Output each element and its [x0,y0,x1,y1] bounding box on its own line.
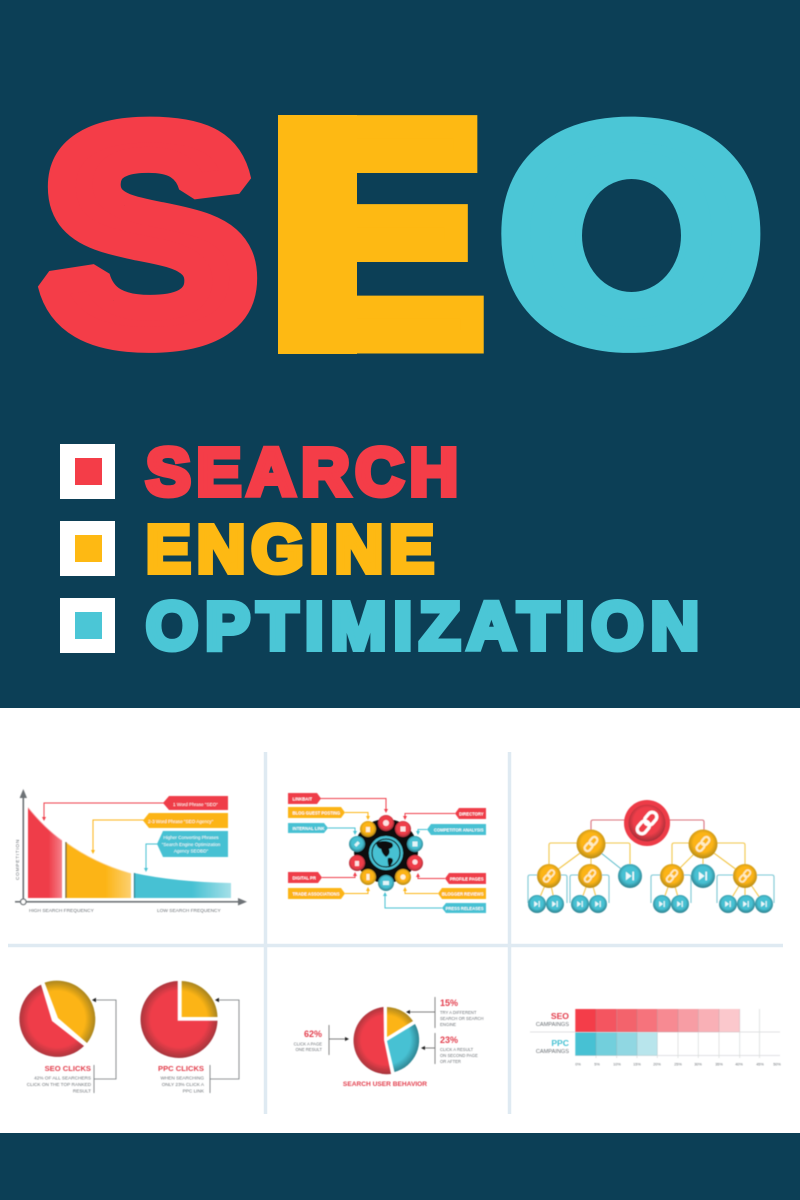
panel: link tree diagram [528,800,774,913]
grid [530,1009,780,1058]
description: PPC LINK [183,1088,205,1094]
stat: 62%: ONE RESULT [296,1047,322,1052]
label: competitor analysis: COMPETITOR ANALYSIS [434,828,484,832]
label: digital pr: DIGITAL PR [292,876,316,880]
bullet: red square [60,444,115,499]
stat: 23%: OR AFTER [440,1059,461,1064]
axis labels [575,1062,781,1066]
label: directory [403,808,486,820]
label: profile pages [416,873,486,884]
globe [369,836,403,870]
stat: 15%: TRY A DIFFERENT [440,1010,477,1015]
callout: higher converting phrases: "Search Engine Optimization [162,842,221,847]
axes [15,789,247,906]
pointer [92,998,116,1093]
label: trade associations: TRADE ASSOCIATIONS [292,892,340,896]
description: CLICK ON THE TOP RANKED [27,1082,92,1087]
stat: 62% [294,1025,349,1055]
label: linkbait [288,793,388,813]
callout: 2-3 word phrase: 2-3 Word Phrase "SEO Agency" [148,819,214,824]
description: 42% OF ALL SEARCHERS [34,1076,91,1080]
axis labels: 15% [633,1062,641,1066]
stat: 23% [421,1033,478,1064]
node ring [349,815,423,891]
pie [354,1007,419,1074]
SEO label: SEO [551,1011,569,1021]
bullet: yellow square [60,521,115,576]
label: blog guest posting [288,807,370,820]
panel: campaigns bar chart [530,1009,781,1066]
label: linkbait: LINKBAIT [292,796,312,802]
axis labels: 30% [694,1062,702,1066]
title: SEO [42,59,760,408]
teal curve area [134,873,231,898]
callout: 1 word phrase: 1 Word Phrase "SEO" [173,802,218,807]
title: SEO: E [272,59,484,408]
axis label: competition: COMPETITION [15,839,21,880]
label: blogger reviews: BLOGGER REVIEWS [442,892,484,896]
title: SEO: O [502,68,760,400]
callout: higher converting phrases: Agency SEOBD" [174,848,209,854]
axis labels: 50% [773,1062,781,1066]
description [160,1076,205,1094]
bullet: teal square [60,598,115,653]
description [27,1076,92,1094]
description: ONLY 23% CLICK A [162,1082,205,1087]
panel: PPC clicks pie [141,981,239,1094]
callout: higher converting phrases: Higher Converting Phrases [163,835,219,840]
PPC bar [575,1032,657,1056]
stat: 23%: 23% [440,1035,458,1045]
acronym list [60,435,699,664]
axis labels: 25% [674,1062,682,1066]
red curve area [28,807,62,898]
label: trade associations [288,887,370,899]
PPC label: PPC [551,1038,569,1048]
word: ENGINE: ENGINE [146,512,434,587]
stat: 15%: ENGINE [440,1022,456,1027]
word: SEARCH: SEARCH [146,435,458,510]
word: OPTIMIZATION: OPTIMIZATION [146,589,699,664]
panel: competition curve chart [15,789,247,914]
label: blogger reviews [403,887,486,899]
panel: search user behavior pie [294,997,484,1088]
callout: higher converting phrases [144,831,228,872]
label: press releases: PRESS RELEASES [446,906,484,911]
SEO label [536,1011,569,1028]
teal nodes [528,864,773,913]
heading: PPC CLICKS [158,1064,204,1073]
label: press releases [383,892,486,913]
callout: 1 word phrase [42,796,228,821]
axis labels: 0% [575,1062,581,1066]
SEO label: CAMPAINGS [536,1022,569,1028]
stat: 15%: 15% [440,998,458,1008]
PPC label: CAMPAINGS [536,1049,569,1055]
stat: 15% [406,997,484,1028]
SEO bar [575,1009,740,1032]
label: digital pr [288,872,357,883]
description: WHEN SEARCHING [160,1076,204,1080]
bottom navy band [0,1133,800,1200]
panel: link building wheel [288,793,486,913]
title: SEO: S [42,69,256,401]
axis labels: 35% [715,1062,723,1066]
axis labels: 10% [613,1062,621,1066]
yellow nodes [537,830,757,888]
heading: SEO CLICKS [45,1064,91,1073]
connector lines [528,820,774,904]
axis label: low search frequency: LOW SEARCH FREQUENCY [157,908,221,914]
root node [624,800,670,846]
axis label: high search frequency: HIGH SEARCH FREQUENCY [29,908,95,914]
description: RESULT [73,1088,91,1094]
axis labels: 45% [756,1062,764,1066]
pointer [210,998,239,1093]
axis labels: 20% [653,1062,661,1066]
stat: 23%: CLICK A RESULT [440,1047,474,1052]
stat: 23%: ON SECOND PAGE [440,1053,478,1058]
yellow curve area [66,842,131,898]
stat: 62%: CLICK A PAGE [294,1042,322,1046]
label: directory: DIRECTORY [459,812,484,816]
label: internal link: INTERNAL LINK [292,826,325,831]
label: internal link [288,823,357,835]
label: competitor analysis [416,824,486,835]
pie title: SEARCH USER BEHAVIOR [343,1081,427,1088]
stat: 15%: SEARCH OR SEARCH [440,1016,484,1021]
axis labels: 5% [594,1062,600,1066]
label: blog guest posting: BLOG GUEST POSTING [292,810,340,816]
pie [19,981,95,1057]
callout: 2-3 word phrase [91,813,228,854]
pie [141,981,218,1058]
axis labels: 40% [735,1062,743,1066]
black hub [354,819,418,883]
top navy banner [0,0,800,708]
label: profile pages: PROFILE PAGES [450,876,484,882]
stat: 62%: 62% [304,1029,322,1039]
PPC label [536,1038,569,1055]
panel: SEO clicks pie [19,981,116,1094]
